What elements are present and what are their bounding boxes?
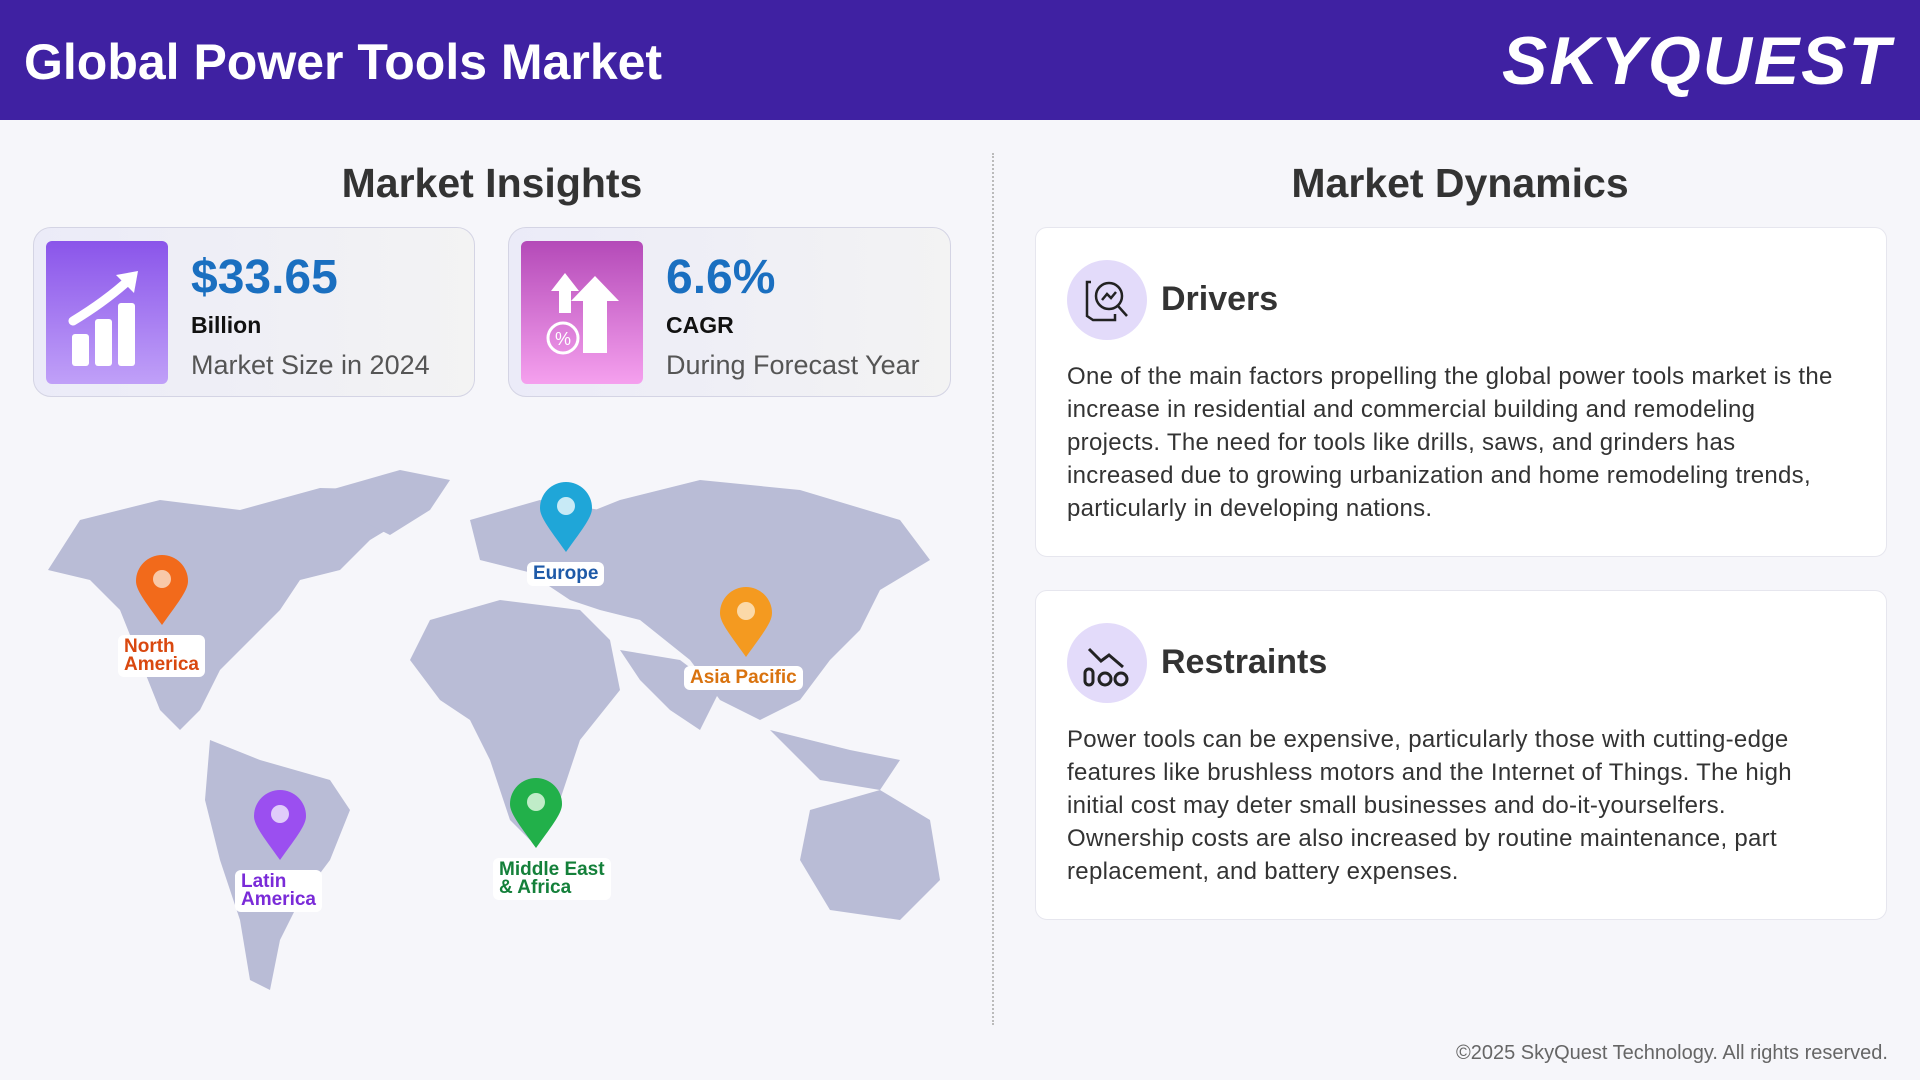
card: cagr: CAGR <box>666 312 734 338</box>
pin: europe <box>527 482 604 586</box>
pin: europe: Europe <box>533 563 598 584</box>
panel: drivers: Drivers <box>1161 280 1278 318</box>
pin: asia pacific <box>684 587 803 690</box>
panel: drivers: One of the main factors propelling the global power tools market is the increase in residential and commercial building and remodeling projects. The need for tools like drills, saws, and grinders has increased due to growing urbanization and home remodeling trends, particularly in developing nations. <box>1067 363 1833 522</box>
card: cagr <box>508 227 951 397</box>
pin: middle east africa: Middle East <box>499 859 605 880</box>
card: cagr: During Forecast Year <box>666 350 920 380</box>
icon: arrows percent <box>521 241 643 384</box>
pin: asia pacific: Asia Pacific <box>690 667 797 688</box>
pin: north america: North <box>124 636 175 657</box>
pin: latin america: America <box>241 889 316 910</box>
icon: restraints <box>1067 623 1147 703</box>
title: Global Power Tools Market <box>24 34 662 90</box>
panel: restraints: Restraints <box>1161 643 1327 681</box>
panel: restraints: Power tools can be expensive, particularly those with cutting-edge features like brushless motors and the Internet of Things. The high initial cost may deter small businesses and do-it-yourselfers. Ownership costs are also increased by routine maintenance, part replacement, and battery expenses. <box>1067 726 1792 885</box>
pin: north america: America <box>124 654 199 675</box>
footer: ©2025 SkyQuest Technology. All rights reserved. <box>1456 1042 1888 1064</box>
header bar <box>0 0 1920 120</box>
card: market size: Market Size in 2024 <box>191 350 430 380</box>
logo: SKYQUEST <box>1502 23 1892 99</box>
card: market size <box>33 227 475 397</box>
pin: latin america <box>235 790 322 912</box>
heading: market insights: Market Insights <box>342 160 642 206</box>
card: market size: $33.65 <box>191 251 338 304</box>
pin: middle east africa: & Africa <box>499 877 571 898</box>
icon: arrows percent: % <box>555 329 571 349</box>
pin: north america <box>118 555 205 677</box>
panel: restraints <box>1035 590 1887 920</box>
card: cagr: 6.6% <box>666 251 775 304</box>
panel: drivers <box>1035 227 1887 557</box>
pin: middle east africa <box>493 778 611 900</box>
heading: market dynamics: Market Dynamics <box>1291 160 1629 206</box>
icon: drivers <box>1067 260 1147 340</box>
card: market size: Billion <box>191 312 261 338</box>
icon: bar chart <box>46 241 168 384</box>
pin: latin america: Latin <box>241 871 286 892</box>
world map <box>48 470 940 990</box>
